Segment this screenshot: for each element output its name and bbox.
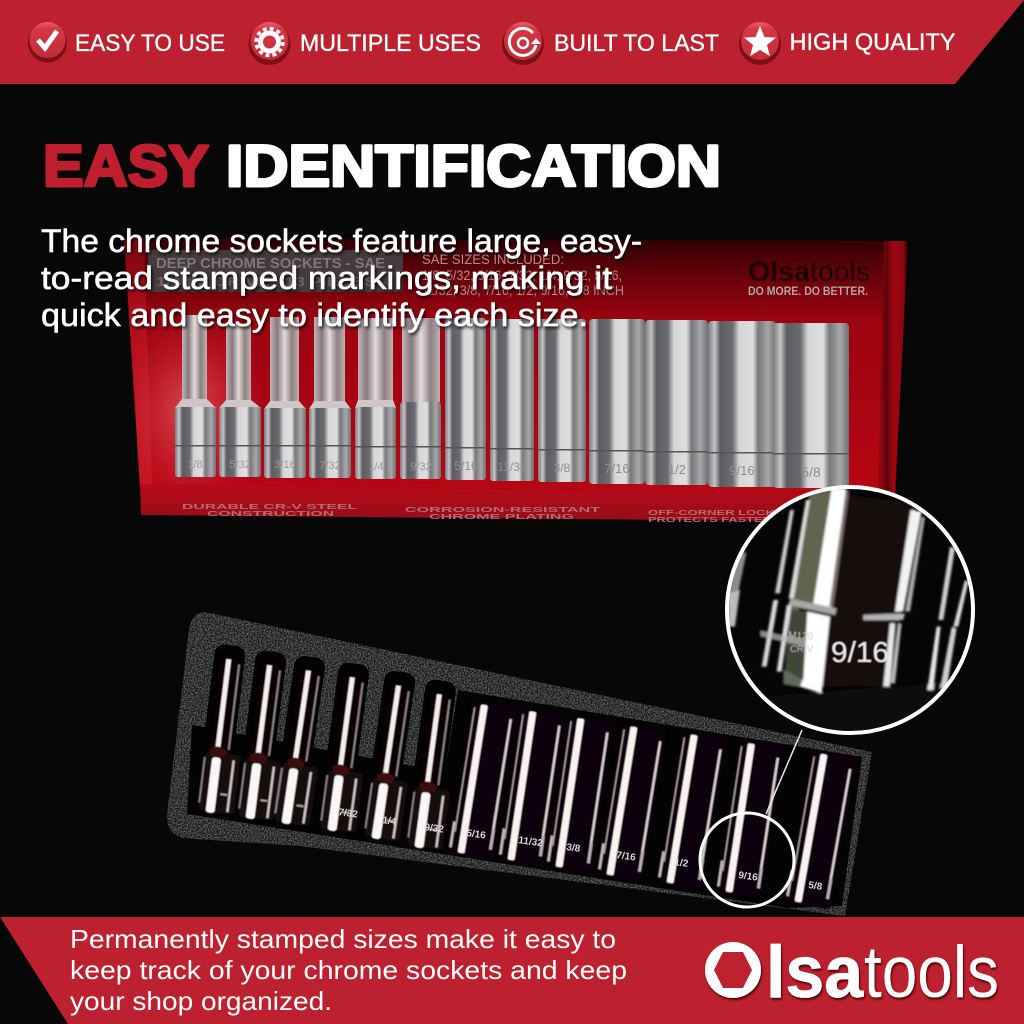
intro text block: quick and easy to identify each size. (41, 297, 588, 333)
socket 1/2: 1/2 (668, 462, 686, 477)
tray socket stamped sizes: 5/16 (466, 828, 487, 842)
box flap captions: DURABLE CR-V STEEL (182, 504, 359, 511)
box left side panel (124, 238, 152, 488)
tray socket stamped sizes: 3/8 (566, 842, 581, 855)
label: built to last: BUILT TO LAST (554, 30, 719, 57)
tray socket cavities (202, 643, 457, 794)
socket 5/8 (773, 323, 849, 488)
box front panel (126, 238, 906, 494)
icon: circular arrow with gear (502, 22, 544, 65)
tray chrome sockets (197, 657, 857, 910)
brand logo: tools (864, 932, 999, 1013)
socket 1/4: 1/4 (368, 461, 384, 473)
socket 3/8 (538, 319, 586, 482)
socket 1/4 (355, 318, 396, 479)
icon: gear (248, 22, 290, 65)
socket 9/16 (708, 321, 776, 487)
bottom description text: keep track of your chrome sockets and keep (70, 955, 627, 985)
socket 7/32 (309, 317, 351, 478)
product box: red socket set packaging (115, 238, 908, 524)
brand logo: lsa (766, 932, 864, 1013)
socket 11/32 (490, 319, 534, 481)
label: easy to use: EASY TO USE (75, 30, 225, 57)
box flap captions (182, 504, 799, 524)
box brand logo: Olsa (748, 256, 810, 287)
black plastic tray with chrome sockets (167, 612, 872, 916)
socket 9/32 (400, 318, 441, 479)
box heading plate (148, 250, 403, 292)
socket 3/16: 3/16 (274, 459, 296, 471)
brand logo: O (705, 929, 761, 1013)
socket 5/8: 5/8 (801, 464, 821, 480)
socket 1/8: 1/8 (187, 459, 203, 471)
box size list (422, 252, 624, 298)
socket 7/16: 7/16 (604, 461, 630, 476)
socket 3/16 (264, 317, 306, 478)
label: multiple uses: MULTIPLE USES (300, 30, 481, 57)
box heading plate: 1/4 IN. DRIVE - 13 PIECES (156, 274, 376, 289)
box size list: 1/8, 5/32, 3/16, 7/32, 1/4, 9/32, 5/16, (422, 268, 622, 283)
stamped size marking: CR-V (790, 644, 814, 655)
box brand logo (748, 256, 870, 298)
socket 9/16: 9/16 (729, 463, 755, 478)
stamped size marking: M120 (788, 630, 814, 643)
label: high quality: HIGH QUALITY (790, 29, 956, 56)
brand logo (705, 929, 999, 1013)
bottom red banner (0, 917, 1024, 1024)
box lower flap (140, 484, 894, 522)
tray socket stamped sizes: 9/16 (738, 870, 759, 884)
stamped size marking (788, 630, 888, 664)
intro text block (41, 223, 642, 333)
box heading plate: DEEP CHROME SOCKETS - SAE (156, 255, 385, 272)
box size list: 11/32, 3/8, 7/16, 1/2, 9/16, 5/8 INCH (422, 283, 624, 298)
top red banner (0, 0, 1024, 84)
box brand logo: tools (810, 256, 870, 287)
stamped size marking: 9/16 (831, 637, 889, 669)
callout leader line (766, 730, 802, 814)
tray socket stamped sizes: 11/32 (518, 835, 544, 849)
icon: star (739, 22, 781, 65)
socket 5/16: 5/16 (454, 459, 478, 473)
socket 5/32: 5/32 (229, 459, 251, 471)
socket 1/8 (175, 315, 216, 477)
box brand logo: DO MORE. DO BETTER. (748, 286, 868, 298)
box flap captions: CONSTRUCTION (207, 511, 334, 518)
socket 9/32: 9/32 (410, 461, 432, 473)
socket 7/16 (589, 319, 645, 484)
tray body (167, 612, 872, 916)
callout magnified socket circle (720, 486, 980, 740)
tray socket stamped sizes: 1/2 (674, 857, 689, 870)
bottom description text (70, 924, 627, 1016)
socket 5/32 (219, 324, 261, 477)
box flap captions: PROTECTS FASTENERS (648, 517, 799, 524)
tray socket stamped sizes: 7/32 (338, 807, 359, 821)
tray socket stamped sizes: 1/4 (382, 815, 397, 828)
title: EASY (43, 134, 209, 199)
bottom description text: your shop organized. (70, 986, 332, 1016)
title (43, 134, 721, 199)
intro text block: The chrome sockets feature large, easy- (41, 223, 642, 259)
tray socket stamped sizes: 9/32 (424, 822, 445, 836)
tray well (187, 690, 862, 908)
socket 1/2 (645, 320, 708, 485)
intro text block: to-read stamped markings, making it (41, 260, 612, 296)
tray socket stamped sizes (338, 807, 823, 893)
title: IDENTIFICATION (226, 134, 721, 199)
socket 11/32: 11/32 (497, 460, 527, 474)
bottom description text: Permanently stamped sizes make it easy to (70, 924, 616, 954)
socket 5/16 (445, 318, 486, 480)
socket 7/32: 7/32 (319, 460, 341, 472)
callout small circle on 9/16 socket (700, 813, 794, 907)
tray socket stamped sizes: 7/16 (616, 850, 637, 864)
box right side panel (878, 241, 908, 496)
tray socket stamped sizes: 5/8 (808, 880, 823, 893)
box glare (136, 330, 226, 484)
box flap captions: CHROME PLATING (429, 514, 575, 521)
socket 3/8: 3/8 (554, 461, 571, 475)
box flap captions: CORROSION-RESISTANT (405, 507, 602, 514)
box flap captions: OFF-CORNER LOCKING (648, 510, 799, 517)
box size list: SAE SIZES INCLUDED: (422, 252, 564, 267)
box socket illustrations (175, 315, 849, 488)
icon: check (28, 22, 67, 62)
